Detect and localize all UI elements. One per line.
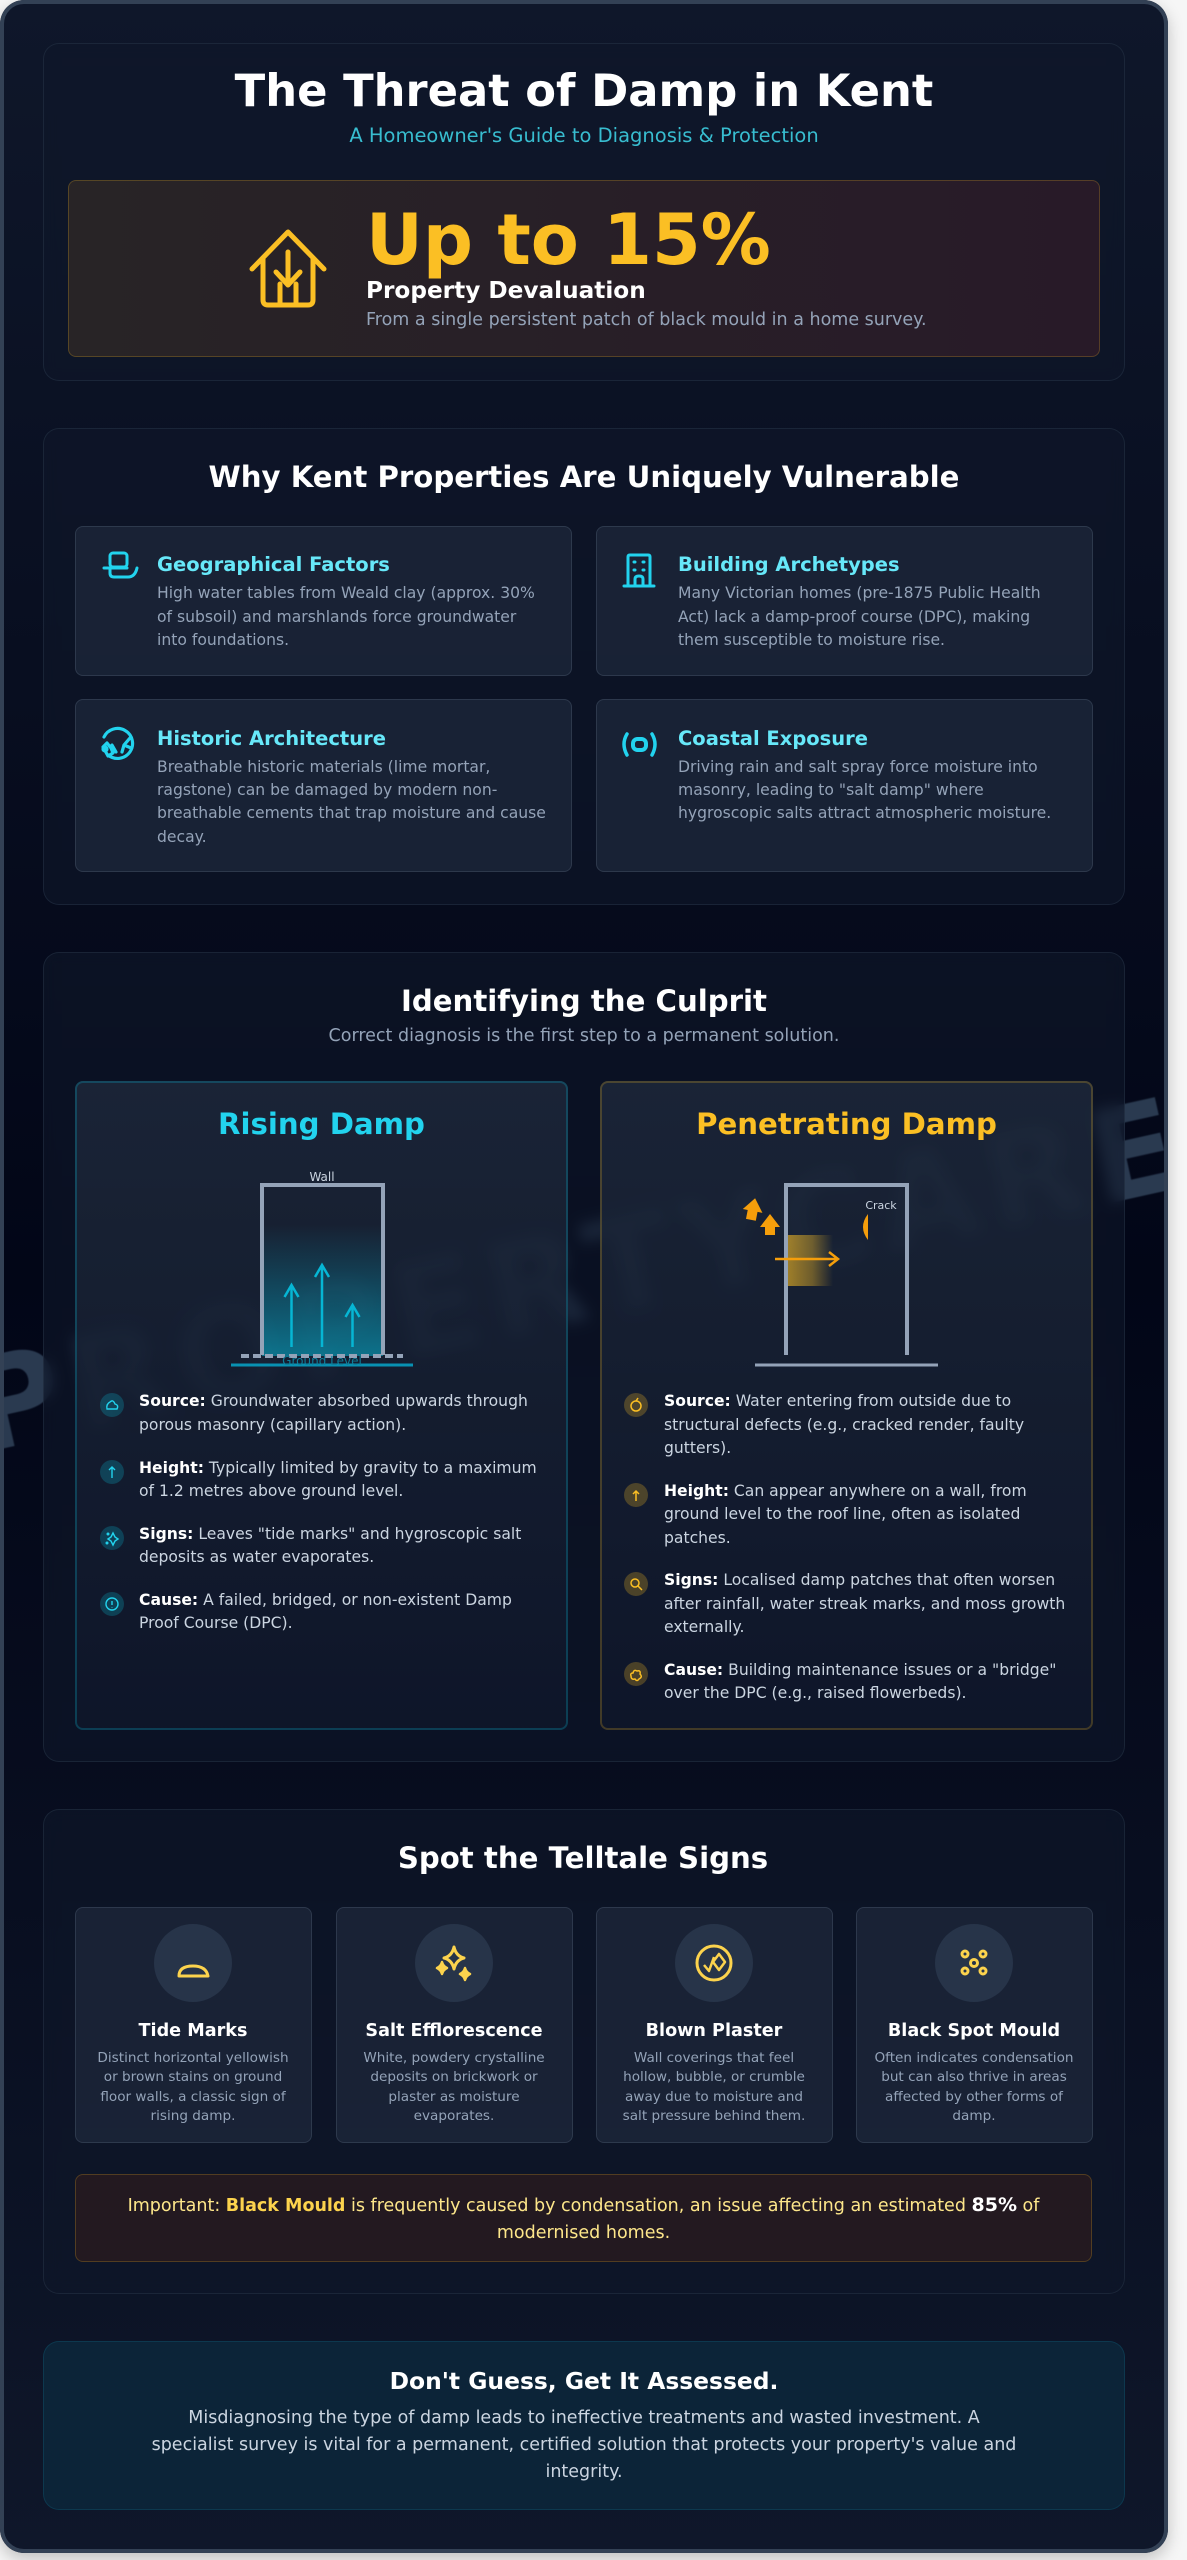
diagram: penetrating damp wall — [742, 1183, 938, 1366]
section intro: Correct diagnosis is the first step to a permanent solution. — [329, 1026, 839, 1046]
callout text — [128, 2194, 1040, 2243]
list item: height: Height: Typically limited by gravity to a maximum — [139, 1459, 537, 1477]
sign description: affected by other forms of — [885, 2089, 1063, 2105]
card text: decay. — [157, 828, 207, 846]
list item: source: structural defects (e.g., cracked render, faulty — [664, 1416, 1024, 1434]
list item: source: porous masonry (capillary action). — [139, 1416, 406, 1434]
card title: Geographical Factors — [157, 553, 390, 576]
stat description: From a single persistent patch of black mould in a home survey. — [366, 310, 927, 330]
card title: Building Archetypes — [678, 553, 900, 576]
list item: cause: over the DPC (e.g., raised flowerbeds). — [664, 1684, 966, 1702]
list item: cause: Cause: A failed, bridged, or non-existent Damp — [139, 1591, 512, 1609]
call to action text: specialist survey is vital for a permanent, certified solution that protects your property's value and — [152, 2434, 1016, 2454]
diagram: penetrating damp wall: Crack — [865, 1199, 897, 1212]
card: salt efflorescence — [336, 1907, 573, 2143]
callout: property devaluation stat — [68, 180, 1100, 357]
sign description: or brown stains on ground — [104, 2069, 282, 2085]
icon: salt — [415, 1924, 493, 2002]
panel: rising damp — [75, 1081, 568, 1730]
call to action text: integrity. — [545, 2462, 623, 2482]
sign description: but can also thrive in areas — [881, 2069, 1067, 2085]
call to action text — [152, 2408, 1016, 2482]
call to action heading: Don't Guess, Get It Assessed. — [390, 2366, 778, 2394]
sign title: Black Spot Mould — [888, 2020, 1060, 2040]
list item: signs: externally. — [664, 1618, 744, 1636]
list item: source: Source: Water entering from outside due to — [664, 1392, 1011, 1410]
list item: signs: Signs: Leaves "tide marks" and hygroscopic salt — [139, 1525, 521, 1543]
card text: of subsoil) and marshlands force groundwater — [157, 608, 516, 626]
sign description — [97, 2050, 289, 2124]
card text — [678, 584, 1041, 649]
list item: cause: Proof Course (DPC). — [139, 1614, 293, 1632]
card text: breathable cements that trap moisture and cause — [157, 804, 546, 822]
card text — [157, 758, 546, 846]
card text: ragstone) can be damaged by modern non- — [157, 781, 497, 799]
rising damp title: Rising Damp — [218, 1106, 425, 1140]
card title: Coastal Exposure — [678, 726, 868, 750]
sign title: Blown Plaster — [646, 2020, 782, 2040]
card text: Many Victorian homes (pre-1875 Public Health — [678, 584, 1041, 602]
list item: signs — [624, 1571, 1065, 1636]
list item: height — [624, 1482, 1027, 1547]
icon: tide marks — [154, 1924, 232, 2002]
list item: source: gutters). — [664, 1439, 731, 1457]
sign description: rising damp. — [151, 2108, 235, 2124]
list item: source — [624, 1392, 1024, 1457]
card: geographical factors — [75, 526, 572, 676]
subtitle: A Homeowner's Guide to Diagnosis & Protection — [349, 124, 819, 146]
icon: house with rising damp — [250, 230, 326, 308]
list item: cause — [100, 1591, 512, 1632]
list item: cause — [624, 1661, 1056, 1702]
panel: header — [43, 43, 1125, 381]
list item: height: of 1.2 metres above ground level. — [139, 1482, 403, 1500]
sign description — [363, 2050, 545, 2124]
sign description: deposits on brickwork or — [370, 2069, 538, 2085]
card: historic architecture — [75, 699, 572, 872]
icon: historic — [101, 726, 134, 760]
list item: cause: Cause: Building maintenance issues or a "bridge" — [664, 1661, 1056, 1679]
sign description: floor walls, a classic sign of — [100, 2089, 286, 2105]
card text — [678, 758, 1051, 822]
card text: Driving rain and salt spray force moisture into — [678, 758, 1038, 776]
card text: masonry, leading to "salt damp" where — [678, 781, 984, 799]
list item: signs — [100, 1525, 521, 1566]
list item: source: Source: Groundwater absorbed upwards through — [139, 1392, 528, 1410]
sign title: Salt Efflorescence — [365, 2020, 543, 2040]
penetrating damp title: Penetrating Damp — [696, 1106, 997, 1140]
list item: signs: after rainfall, water streak marks, and moss growth — [664, 1595, 1065, 1613]
card text — [157, 584, 535, 649]
icon: blown plaster — [675, 1924, 753, 2002]
heading: Spot the Telltale Signs — [398, 1841, 768, 1875]
sign description — [623, 2050, 805, 2124]
callout text: Important: Black Mould is frequently caused by condensation, an issue affecting an estimated 85% of — [128, 2194, 1039, 2216]
sign description: salt pressure behind them. — [623, 2108, 805, 2124]
icon: building — [622, 554, 656, 588]
panel: call to action — [43, 2341, 1125, 2510]
card: blown plaster — [596, 1907, 833, 2143]
list item: signs: deposits as water evaporates. — [139, 1548, 374, 1566]
sign description: hollow, bubble, or crumble — [623, 2069, 805, 2085]
card text: into foundations. — [157, 631, 289, 649]
sign title: Tide Marks — [139, 2020, 247, 2040]
sign description: Distinct horizontal yellowish — [97, 2050, 289, 2066]
diagram: rising damp wall: Ground Level — [282, 1354, 362, 1368]
card text: Act) lack a damp-proof course (DPC), making — [678, 608, 1030, 626]
list item: height: ground level to the roof line, often as isolated — [664, 1505, 1020, 1523]
card: building archetypes — [596, 526, 1093, 676]
sign description — [874, 2050, 1074, 2124]
card text: hygroscopic salts attract atmospheric moisture. — [678, 804, 1051, 822]
sign description: away due to moisture and — [625, 2089, 803, 2105]
panel: spot the telltale signs — [43, 1809, 1125, 2294]
card text: High water tables from Weald clay (approx. 30% — [157, 584, 535, 602]
card title: Historic Architecture — [157, 726, 386, 750]
diagram: rising damp wall: Wall — [309, 1170, 335, 1184]
icon: coastal — [622, 732, 657, 757]
list item: height: patches. — [664, 1529, 731, 1547]
sign description: damp. — [952, 2108, 996, 2124]
card: black spot mould — [856, 1907, 1093, 2143]
card text: Breathable historic materials (lime mortar, — [157, 758, 490, 776]
panel: why Kent properties are vulnerable — [43, 428, 1125, 905]
card: coastal exposure — [596, 699, 1093, 872]
list item: signs: Signs: Localised damp patches that often worsen — [664, 1571, 1055, 1589]
sign description: Often indicates condensation — [874, 2050, 1074, 2066]
heading: Why Kent Properties Are Uniquely Vulnerable — [209, 460, 959, 494]
card: tide marks — [75, 1907, 312, 2143]
sign description: Wall coverings that feel — [634, 2050, 794, 2066]
stat figure: Up to 15% — [366, 199, 771, 281]
callout text: modernised homes. — [497, 2223, 670, 2243]
title: The Threat of Damp in Kent — [235, 64, 933, 117]
call to action text: Misdiagnosing the type of damp leads to ineffective treatments and wasted investment. A — [188, 2408, 980, 2428]
card text: them susceptible to moisture rise. — [678, 631, 945, 649]
icon: geographical — [102, 552, 138, 578]
diagram: rising damp wall — [231, 1170, 413, 1368]
panel: penetrating damp — [600, 1081, 1093, 1730]
list item: source — [100, 1392, 528, 1434]
sign description: evaporates. — [414, 2108, 494, 2124]
callout: black mould note — [75, 2174, 1092, 2262]
stat label: Property Devaluation — [366, 277, 646, 304]
panel: identifying the culprit — [43, 952, 1125, 1762]
list item: height — [100, 1459, 537, 1500]
list item: height: Height: Can appear anywhere on a wall, from — [664, 1482, 1027, 1500]
sign description: White, powdery crystalline — [363, 2050, 545, 2066]
icon: mould — [935, 1924, 1013, 2002]
sign description: plaster as moisture — [388, 2089, 520, 2105]
heading: Identifying the Culprit — [401, 984, 767, 1018]
